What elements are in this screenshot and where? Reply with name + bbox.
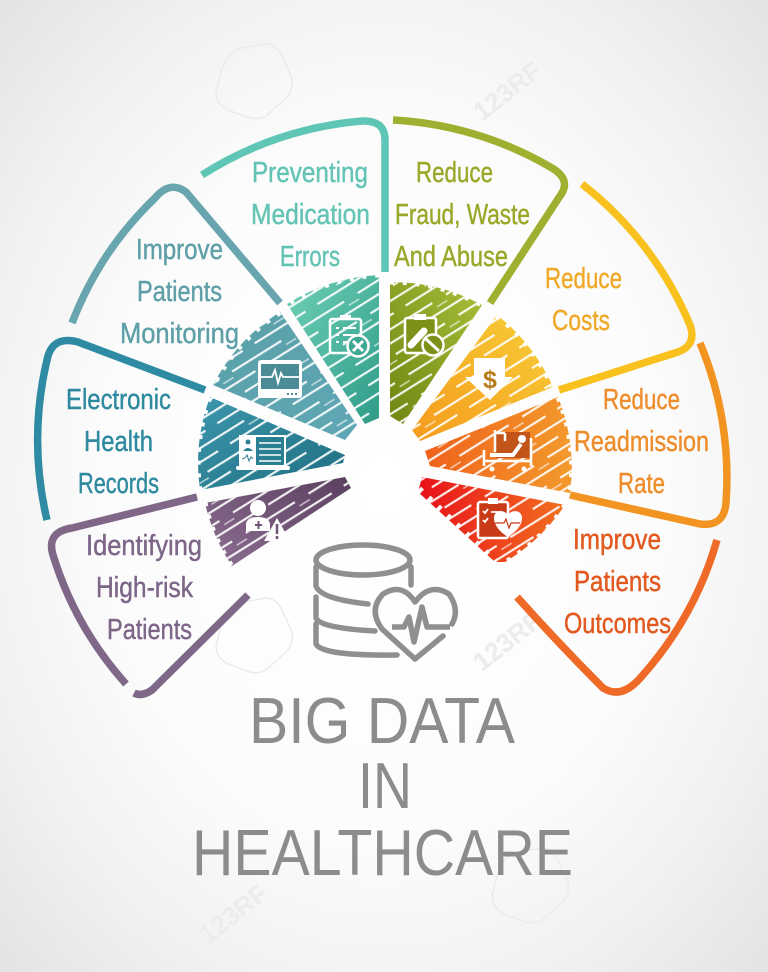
- label text: Reduce: [603, 384, 680, 416]
- label text: Electronic: [66, 384, 171, 416]
- hatched wedge: [287, 273, 379, 424]
- watermarks: [193, 44, 568, 950]
- hatched wedge: [203, 477, 351, 567]
- label text: Improve: [573, 524, 661, 556]
- icon: patient with warning: [246, 500, 290, 541]
- title: BIG DATA: [249, 684, 516, 757]
- outline: [38, 340, 205, 520]
- label text: Records: [78, 468, 159, 500]
- outline: [393, 120, 564, 303]
- label text: Reduce: [416, 157, 493, 189]
- outline: [570, 343, 727, 524]
- label text: Health: [84, 426, 153, 458]
- hatched wedge: [212, 311, 357, 440]
- segment: reduce readmission rate: [425, 343, 727, 524]
- segment: electronic health records: [38, 340, 345, 520]
- hatched wedge: [418, 477, 567, 564]
- label text: Monitoring: [120, 318, 239, 350]
- label text: And Abuse: [394, 241, 508, 273]
- hatched wedge: [425, 397, 574, 493]
- label text: Identifying: [86, 530, 202, 562]
- label text: Patients: [107, 614, 192, 646]
- watermarks: 123RF: [193, 878, 273, 950]
- label text: Costs: [552, 305, 610, 337]
- label text: Patients: [574, 566, 661, 598]
- segment: identifying high-risk patients: [52, 477, 351, 694]
- outline: [559, 184, 692, 390]
- icon: hospital bed: [483, 430, 532, 472]
- label text: Fraud, Waste: [395, 199, 530, 231]
- hatched wedge: [390, 280, 482, 424]
- hatched wedge: [412, 314, 554, 441]
- title: HEALTHCARE: [192, 816, 573, 889]
- icon: clipboard with heart: [478, 498, 522, 538]
- label text: Patients: [137, 276, 222, 308]
- label text: Reduce: [545, 263, 622, 295]
- icon: dollar down arrow: $: [483, 366, 497, 394]
- segment: reduce costs: [412, 184, 692, 441]
- watermarks: 123RF: [467, 55, 547, 127]
- hatched wedge: [196, 397, 345, 490]
- label text: Rate: [618, 468, 665, 500]
- label text: High-risk: [96, 572, 193, 604]
- segment: preventing medication errors: [202, 121, 385, 424]
- outline: [72, 187, 280, 323]
- segment: reduce fraud, waste and abuse: [390, 120, 564, 424]
- icon: electronic record laptop: [236, 435, 290, 470]
- label text: Outcomes: [564, 608, 671, 640]
- outline: [517, 540, 717, 692]
- outline: [202, 121, 385, 272]
- segment: improve patients outcomes: [418, 477, 717, 692]
- label text: Errors: [280, 241, 340, 273]
- title: [192, 684, 573, 889]
- icon: clipboard with cross: [330, 315, 368, 356]
- watermarks: 123RF: [467, 605, 547, 677]
- title: IN: [358, 749, 412, 822]
- segment: improve patients monitoring: [72, 187, 357, 440]
- label text: Medication: [251, 199, 370, 231]
- icon: clipboard with pill: [405, 314, 444, 356]
- label text: Readmission: [574, 426, 709, 458]
- icon: database with heart: [316, 545, 455, 659]
- outlines: [52, 497, 248, 694]
- icon: patient monitor: [258, 360, 302, 398]
- label text: Improve: [136, 234, 223, 266]
- label text: Preventing: [252, 157, 368, 189]
- icon: dollar down arrow: [465, 358, 513, 400]
